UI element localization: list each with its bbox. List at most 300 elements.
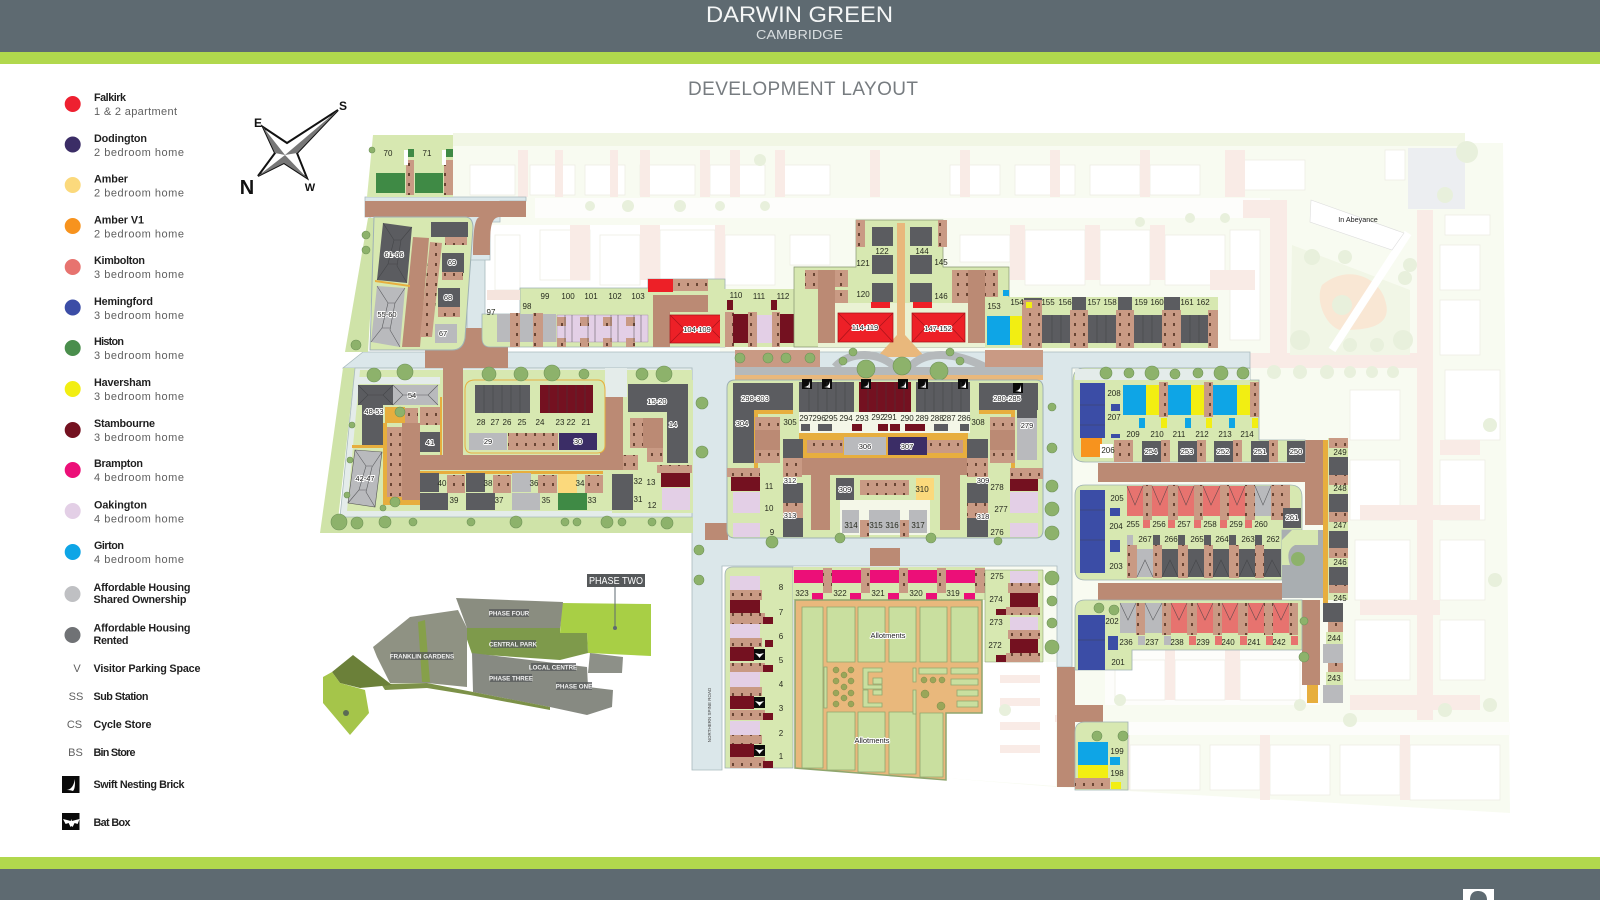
legend item: Cycle Store: Cycle Store [94, 719, 152, 731]
plot numbers: 260 [1254, 520, 1268, 529]
legend item: Kimbolton: Kimbolton [94, 255, 145, 267]
plot labels [852, 323, 952, 333]
plot numbers: 36 [530, 479, 539, 488]
legend item: Histon: Histon [94, 336, 124, 348]
plot numbers [987, 298, 1210, 311]
plot numbers [477, 418, 591, 427]
plot numbers: 102 [608, 292, 622, 301]
plot labels: 253 [1181, 447, 1193, 456]
legend item: Bin Store: Bin Store [94, 747, 136, 759]
plot numbers: 288 [930, 414, 944, 423]
plot labels on roofs: 306 [859, 442, 871, 451]
plot numbers: 99 [541, 292, 550, 301]
plot numbers: 31 [634, 495, 643, 504]
legend item: Hemingford: Hemingford [94, 296, 153, 308]
masterplan parcels [323, 598, 623, 735]
legend item: Amber [65, 174, 184, 200]
plot numbers: 296 [812, 414, 826, 423]
legend item: Oakington [65, 500, 184, 526]
plot numbers [779, 583, 784, 761]
plot numbers: 210 [1150, 430, 1164, 439]
legend item: Visitor Parking Space: V [73, 663, 81, 675]
legend item: Affordable Housing Rented: Affordable Housing [94, 622, 190, 634]
legend item: Cycle Store [67, 719, 152, 731]
legend item: Hemingford: 3 bedroom home [94, 310, 184, 322]
masterplan labels: FRANKLIN GARDENS [390, 654, 454, 660]
legend item: Sub Station [69, 691, 148, 703]
trees [1092, 731, 1128, 741]
plot numbers: 120 [856, 290, 870, 299]
compass rose [240, 99, 347, 199]
legend item: Swift Nesting Brick: Swift Nesting Brick [94, 779, 185, 791]
plot labels: 29 [484, 437, 492, 446]
masterplan labels: LOCAL CENTRE [529, 664, 577, 672]
plot numbers: 61-66 [384, 250, 404, 259]
plot numbers: 237 [1145, 638, 1159, 647]
plot numbers: 158 [1103, 298, 1117, 307]
header banner [0, 0, 1600, 64]
plot numbers: 68 [444, 293, 452, 302]
plot numbers: 37 [495, 496, 504, 505]
site plan: faded future phases [453, 133, 1510, 813]
plot numbers: 315 [869, 521, 883, 530]
legend item: Amber V1: Amber V1 [94, 214, 144, 226]
plot labels on roofs: 307 [901, 442, 913, 451]
plot numbers: 259 [1229, 520, 1243, 529]
legend item: Stambourne: 3 bedroom home [94, 432, 184, 444]
legend item: Falkirk [65, 92, 177, 118]
plot numbers: 1 [779, 752, 784, 761]
plot numbers: 25 [518, 418, 527, 427]
plot labels: 41 [426, 438, 434, 447]
plot numbers: 144 [915, 247, 929, 256]
plot numbers: 265 [1190, 535, 1204, 544]
plot numbers: 198 [1110, 769, 1124, 778]
plot numbers: 267 [1138, 535, 1152, 544]
plot numbers: 39 [450, 496, 459, 505]
plot numbers: 293 [855, 414, 869, 423]
legend item: Affordable Housing Shared Ownership: Shared Ownership [94, 594, 187, 606]
compass rose: N [240, 177, 254, 199]
masterplan labels: CENTRAL PARK [489, 642, 538, 648]
plot labels on roofs [736, 394, 1033, 521]
block: units 33-54 [348, 385, 603, 510]
plot numbers: 156 [1058, 298, 1072, 307]
plot numbers: 206 [1101, 446, 1115, 455]
legend item: Haversham [65, 377, 184, 403]
icon row: bat boxes [754, 649, 765, 756]
plot numbers [765, 413, 1008, 537]
plot numbers [856, 247, 948, 301]
plot numbers: 287 [942, 414, 956, 423]
plot labels: 251 [1254, 447, 1266, 456]
legend item: Dodington [65, 133, 184, 159]
legend item: Brampton [65, 458, 184, 484]
plot numbers: 214 [1240, 430, 1254, 439]
plot numbers [1110, 747, 1124, 778]
allotment trees [833, 667, 945, 710]
plot labels [355, 391, 434, 483]
callout: phase two: PHASE TWO [589, 576, 643, 587]
trees [735, 348, 964, 380]
plot numbers: 263 [1241, 535, 1255, 544]
plot numbers [1327, 448, 1347, 683]
plot numbers: 2 [779, 729, 784, 738]
plot numbers: 40 [438, 479, 447, 488]
plot labels: 250 [1290, 447, 1302, 456]
allotment plots [802, 607, 978, 777]
legend [62, 92, 200, 830]
plot numbers: 264 [1215, 535, 1229, 544]
parking plaza [1282, 530, 1323, 598]
plot numbers [988, 572, 1004, 650]
plot labels on roofs: 280-285 [993, 394, 1021, 403]
plot numbers: 274 [989, 595, 1003, 604]
plot labels: 48-53 [364, 407, 384, 416]
road name: northern spine: NORTHERN SPINE ROAD [707, 687, 712, 742]
plot labels on roofs: 279 [1021, 421, 1033, 430]
plot numbers: 273 [989, 618, 1003, 627]
plot numbers: 204 [1109, 522, 1123, 531]
plot labels: 42-47 [355, 474, 375, 483]
plot labels [647, 397, 677, 429]
plot numbers: 201 [1111, 658, 1125, 667]
allotments [795, 600, 982, 780]
plot numbers: 8 [779, 583, 784, 592]
legend item: Girton: 4 bedroom home [94, 554, 184, 566]
plot numbers: 319 [946, 589, 960, 598]
plot numbers [1101, 389, 1254, 455]
block: units 97-109 [482, 279, 725, 347]
plot labels: 54 [408, 391, 416, 400]
masterplan labels: PHASE THREE [489, 676, 533, 682]
block: units 243-249 [1307, 438, 1348, 703]
plot numbers: 110 [730, 291, 743, 300]
plot labels: 14 [669, 420, 677, 429]
icon row: swift nesting bricks [802, 379, 1023, 393]
plot numbers: 297 [799, 414, 813, 423]
plot numbers: 286 [957, 414, 971, 423]
plot numbers [384, 149, 432, 158]
plot numbers: 28 [477, 418, 486, 427]
plot label: 261 [1286, 513, 1298, 522]
plot numbers: 159 [1134, 298, 1148, 307]
legend item: Histon [65, 336, 184, 362]
plot numbers [438, 479, 597, 505]
plot numbers: 157 [1087, 298, 1101, 307]
legend item: Kimbolton [65, 255, 184, 281]
callout: phase two [587, 574, 645, 630]
legend item: Girton [65, 540, 184, 566]
plot numbers: 290 [900, 414, 914, 423]
plot numbers: 155 [1041, 298, 1055, 307]
plot numbers: 242 [1272, 638, 1286, 647]
plot numbers: 262 [1266, 535, 1280, 544]
legend item: Affordable Housing Rented [64, 622, 190, 647]
plot numbers: 24 [536, 418, 545, 427]
trees [1100, 366, 1249, 380]
plot labels: 254 [1145, 447, 1157, 456]
plot numbers: 241 [1247, 638, 1261, 647]
block: units 110-113 [720, 289, 820, 347]
plot numbers: 213 [1218, 430, 1232, 439]
plot numbers: 67 [439, 329, 447, 338]
site plan: road network [343, 197, 1250, 770]
plot labels on roofs: 304 [736, 419, 748, 428]
block: units 1-8 [725, 567, 793, 768]
faded brick strips [518, 150, 1480, 800]
block: central apartments 114-152 [794, 220, 1009, 357]
plot numbers [730, 291, 816, 309]
masterplan labels [390, 609, 592, 690]
footer banner [0, 857, 1600, 900]
plot label: 104-109 [683, 325, 711, 334]
icon: footer logo [1463, 889, 1494, 900]
plot numbers: 255 [1126, 520, 1140, 529]
plot labels: 114-119 [852, 323, 878, 332]
label: in abeyance: In Abeyance [1338, 215, 1378, 224]
legend item: Amber V1: 2 bedroom home [94, 228, 184, 240]
plot numbers: 277 [994, 505, 1008, 514]
phase two parcel [560, 603, 651, 656]
plot numbers: 314 [844, 521, 858, 530]
plot labels [1145, 447, 1302, 456]
plot numbers [634, 477, 657, 510]
plot numbers: 7 [779, 608, 784, 617]
plot labels: 147-152 [924, 324, 952, 333]
plot numbers: 310 [915, 485, 929, 494]
plot numbers: 208 [1107, 389, 1121, 398]
legend item: Affordable Housing Shared Ownership [64, 582, 190, 606]
legend item: Brampton: Brampton [94, 458, 143, 470]
legend item: Falkirk: 1 & 2 apartment [94, 106, 177, 118]
plot numbers [487, 292, 645, 317]
trees [1094, 603, 1309, 662]
plot numbers: 27 [491, 418, 500, 427]
plot numbers: 33 [588, 496, 597, 505]
plot numbers: 289 [915, 414, 929, 423]
plot numbers: 122 [875, 247, 889, 256]
legend item: Affordable Housing Rented: Rented [94, 635, 128, 647]
plot numbers: 162 [1196, 298, 1210, 307]
plot numbers: 248 [1333, 484, 1347, 493]
block: units 201-202 and 236-242 [1075, 600, 1309, 670]
masterplan labels: PHASE ONE [556, 684, 592, 690]
plot numbers: 103 [631, 292, 645, 301]
plot numbers: 111 [753, 292, 766, 301]
plot labels on roofs: 313 [784, 511, 796, 520]
plot numbers: 295 [824, 414, 838, 423]
plot numbers: 205 [1110, 494, 1124, 503]
plot numbers: 26 [503, 418, 512, 427]
legend item: Sub Station: Sub Station [94, 691, 148, 703]
plot numbers: 10 [765, 504, 774, 513]
plot numbers: 4 [779, 680, 784, 689]
faded houses [470, 150, 1500, 800]
legend item: Amber V1 [65, 214, 184, 240]
plot numbers: 305 [783, 418, 797, 427]
legend item: Swift Nesting Brick [62, 776, 185, 793]
plot numbers: 153 [987, 302, 1001, 311]
legend item: Hemingford [65, 296, 184, 322]
legend item: Amber: Amber [94, 174, 129, 186]
plot numbers: 5 [779, 656, 784, 665]
legend item: Amber: 2 bedroom home [94, 188, 184, 200]
plot numbers: 160 [1150, 298, 1164, 307]
legend item: Stambourne [65, 418, 184, 444]
plot numbers: 145 [934, 258, 948, 267]
plot numbers: 292 [871, 413, 885, 422]
compass rose: W [305, 182, 316, 194]
plot numbers: 236 [1119, 638, 1133, 647]
plot numbers: 266 [1164, 535, 1178, 544]
entrance square [735, 348, 1043, 380]
plot numbers: 257 [1177, 520, 1191, 529]
plot numbers: 258 [1203, 520, 1217, 529]
plot numbers: 207 [1107, 413, 1121, 422]
legend item: Bat Box: Bat Box [94, 817, 130, 829]
plot numbers: 209 [1126, 430, 1140, 439]
faded plaza [1408, 148, 1465, 209]
block: units 203-205 and 255-267 [1075, 485, 1323, 598]
block: units 153-162 [985, 290, 1218, 348]
trees [766, 533, 1002, 548]
plot numbers: 146 [934, 292, 948, 301]
plot numbers: 38 [484, 479, 493, 488]
plot numbers: 317 [911, 521, 925, 530]
plot numbers: 113 [803, 300, 816, 309]
plot numbers: 21 [582, 418, 591, 427]
plot labels on roofs: 298-303 [741, 394, 769, 403]
allotment labels: Allotments [870, 631, 906, 640]
plot numbers: 240 [1221, 638, 1235, 647]
plot numbers: 9 [770, 528, 775, 537]
legend item: Cycle Store: CS [67, 719, 82, 731]
plot labels on roofs: 312 [784, 476, 796, 485]
plot numbers: 11 [765, 482, 774, 491]
legend item: Bin Store [68, 747, 136, 759]
plot numbers: 35 [542, 496, 551, 505]
plot numbers: 203 [1109, 562, 1123, 571]
block: units 198-199 [1075, 722, 1128, 790]
legend item: Haversham: 3 bedroom home [94, 391, 184, 403]
compass rose: S [339, 99, 347, 113]
block: units 319-323 [793, 567, 985, 600]
plot numbers: 70 [384, 149, 393, 158]
plot numbers: 323 [795, 589, 809, 598]
masterplan labels: PHASE FOUR [489, 610, 530, 618]
legend item: Oakington: 4 bedroom home [94, 514, 184, 526]
block: units 276-318 [727, 379, 1043, 548]
plot numbers: 32 [634, 477, 643, 486]
plot numbers: 275 [990, 572, 1004, 581]
roof ridge lines [348, 223, 1289, 640]
block: units 55-69 [370, 217, 473, 350]
plot numbers: 12 [648, 501, 657, 510]
plot numbers: 322 [833, 589, 847, 598]
plot numbers: 154 [1010, 298, 1024, 307]
legend item: Visitor Parking Space: Visitor Parking Space [94, 663, 200, 675]
faded park [1290, 200, 1410, 355]
plot numbers: 247 [1333, 521, 1347, 530]
block: units 206-214 and 250-254 [1073, 366, 1305, 462]
plot numbers [795, 589, 960, 598]
faded trees [585, 141, 1502, 727]
plot numbers: 23 [556, 418, 565, 427]
site plan: green verges [320, 135, 693, 533]
plot labels [484, 437, 582, 446]
block: units 70-71 [376, 149, 453, 195]
plot numbers: 272 [988, 641, 1002, 650]
plot labels: 15-20 [647, 397, 667, 406]
title: Darwin Green: DARWIN GREEN [706, 2, 893, 27]
plot numbers: 6 [779, 632, 784, 641]
plot numbers: 276 [990, 528, 1004, 537]
plot numbers: 100 [561, 292, 575, 301]
allotment labels [854, 631, 906, 745]
plot labels: 252 [1217, 447, 1229, 456]
compass rose: E [254, 116, 262, 130]
trees [1045, 403, 1059, 654]
site plan: brick streets [365, 201, 1323, 787]
plot numbers [1109, 494, 1280, 571]
legend item: Bin Store: BS [68, 747, 83, 759]
plot numbers: 316 [885, 521, 899, 530]
plot numbers: 199 [1110, 747, 1124, 756]
plot numbers: 121 [856, 259, 870, 268]
legend item: Dodington: Dodington [94, 133, 147, 145]
legend item: Stambourne: Stambourne [94, 418, 155, 430]
plot labels on roofs: 309 [839, 485, 851, 494]
legend item: Falkirk: Falkirk [94, 92, 127, 104]
plot numbers: 320 [909, 589, 923, 598]
plot numbers: 243 [1327, 674, 1341, 683]
plot numbers: 291 [883, 413, 897, 422]
legend item: Sub Station: SS [69, 691, 83, 703]
plot numbers: 34 [576, 479, 585, 488]
plot numbers: 98 [523, 302, 532, 311]
plot numbers: 161 [1180, 298, 1194, 307]
plot numbers: 211 [1173, 430, 1186, 439]
plot numbers: 71 [423, 149, 432, 158]
plot numbers: 245 [1333, 594, 1347, 603]
plot labels: 30 [574, 437, 582, 446]
heading: development layout: DEVELOPMENT LAYOUT [688, 79, 918, 100]
legend item: Bat Box [62, 813, 130, 830]
plot numbers [377, 250, 456, 338]
plot numbers: 13 [647, 478, 656, 487]
legend item: Brampton: 4 bedroom home [94, 472, 184, 484]
legend item: Histon: 3 bedroom home [94, 350, 184, 362]
plot numbers: 256 [1152, 520, 1166, 529]
plot numbers: 69 [448, 258, 456, 267]
inset map: wider masterplan [323, 574, 651, 735]
plot numbers: 238 [1170, 638, 1184, 647]
plot numbers [1105, 617, 1286, 667]
block: units 21-30 [465, 380, 605, 453]
plot numbers: 22 [567, 418, 576, 427]
plot numbers: 101 [584, 292, 598, 301]
legend item: Girton: Girton [94, 540, 124, 552]
plot numbers: 55-60 [377, 310, 397, 319]
plot numbers: 249 [1333, 448, 1347, 457]
legend item: Haversham: Haversham [94, 377, 151, 389]
block: units 272-275 [985, 403, 1059, 662]
plot numbers: 212 [1195, 430, 1209, 439]
plot numbers: 239 [1196, 638, 1210, 647]
plot numbers: 321 [871, 589, 885, 598]
legend item: Kimbolton: 3 bedroom home [94, 269, 184, 281]
